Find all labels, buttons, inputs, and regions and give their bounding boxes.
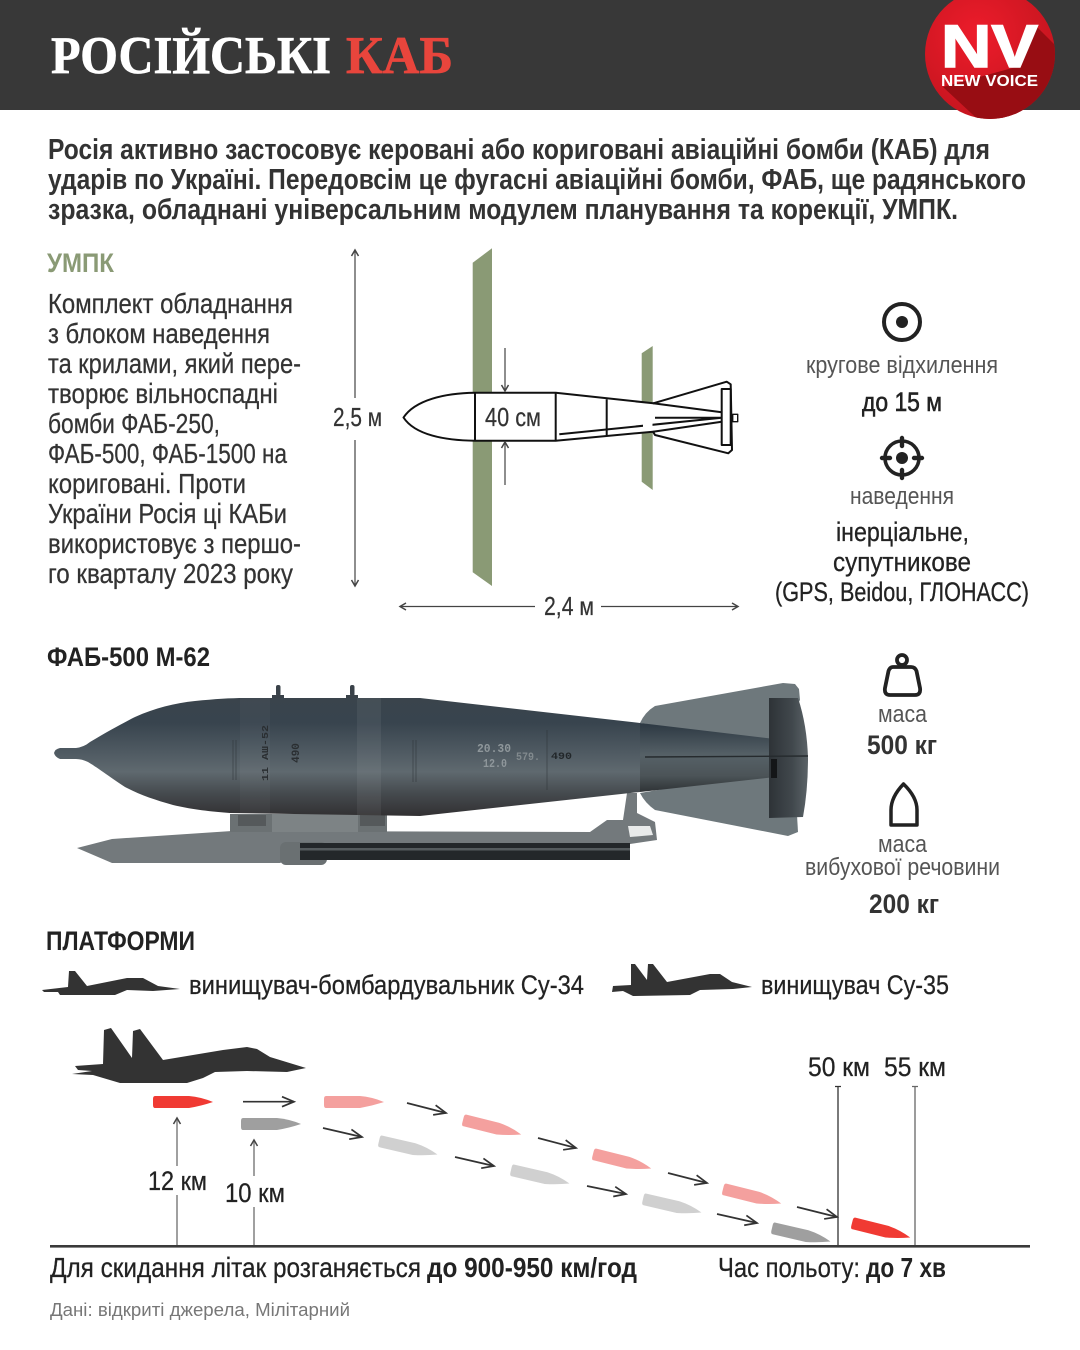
text block: УМПК description: України Росія ці КАБи: [48, 498, 287, 529]
altitude marker: 10 km: 10 км: [225, 1178, 285, 1208]
diagram: UMPK bomb schematic: [404, 248, 738, 586]
body markings: 11 АШ-52: [261, 725, 271, 781]
rail and mounts: [77, 793, 657, 865]
stat: guidance: інерціальне,: [836, 517, 969, 547]
heading: УМПК: УМПК: [47, 248, 114, 278]
altitude marker: 10 km: [225, 1140, 285, 1245]
text block: УМПК description: ФАБ-500, ФАБ-1500 на: [48, 438, 288, 469]
bomb body: [54, 698, 640, 816]
platform: Su-35: винищувач Су-35: [761, 970, 949, 1000]
icon: warhead: [891, 784, 917, 825]
note: release speed: до 900-950 км/год: [427, 1252, 637, 1283]
stat: mass: 500 кг: [867, 730, 937, 760]
stat: circular deviation: кругове відхилення: [806, 352, 998, 379]
icon: guidance crosshair: [882, 438, 922, 478]
body markings: 490: [291, 743, 303, 763]
red trajectory bombs: [153, 1096, 912, 1243]
trajectory arrows: [243, 1102, 837, 1223]
arrows: diameter: [504, 348, 506, 485]
range marker: 55 km: [884, 1052, 946, 1245]
heading: platforms: ПЛАТФОРМИ: [46, 926, 195, 956]
note: release speed: Для скидання літак розганяється: [50, 1252, 421, 1283]
text block: УМПК description: творює вільноспадні: [48, 378, 278, 409]
text block: УМПК description: [48, 288, 301, 589]
tail fins: [640, 683, 800, 836]
stat: explosive mass: [805, 831, 1000, 919]
label: 40 cm: 40 см: [485, 402, 541, 432]
range marker: 50 km: [808, 1052, 870, 1245]
illustration: FAB-500 M-62 bomb with UMPK kit: [54, 683, 808, 865]
range marker: 55 km: 55 км: [884, 1052, 946, 1082]
grey trajectory bombs: [241, 1118, 832, 1247]
platform: Su-35: [612, 964, 949, 1000]
body bands: [233, 690, 547, 820]
stat: explosive mass: маса: [878, 831, 928, 858]
platform: Su-34: [42, 970, 584, 1000]
logo: NV New Voice: NV: [941, 13, 1038, 80]
dimension: height 2,5 m: 2,5 м: [333, 402, 382, 432]
icon: Su-34 silhouette: [42, 971, 180, 995]
body markings: [261, 725, 572, 781]
icon: Su-35 silhouette: [612, 964, 752, 996]
stat: circular deviation: [806, 352, 998, 417]
text block: УМПК description: використовує з першо-: [48, 528, 301, 559]
wings: [473, 248, 653, 586]
intro text: зразка, обладнані універсальним модулем планування та корекції, УМПК.: [48, 194, 958, 226]
stat: mass: [867, 701, 937, 760]
range marker: 50 km: 50 км: [808, 1052, 870, 1082]
tail ring: [769, 698, 808, 818]
body markings: 12.0: [483, 757, 507, 771]
heading: FAB-500 M-62: ФАБ-500 М-62: [47, 642, 210, 672]
logo: NV New Voice: NEW VOICE: [941, 73, 1038, 90]
intro text: [48, 134, 1026, 226]
text block: УМПК description: та крилами, який пере-: [48, 348, 301, 379]
tail cone: [640, 723, 775, 792]
text block: УМПК description: Комплект обладнання: [48, 288, 293, 319]
text block: УМПК description: кориговані. Проти: [48, 468, 246, 499]
header bar: [0, 0, 1080, 110]
stat: guidance: [775, 483, 1029, 607]
platform: Su-34: винищувач-бомбардувальник Су-34: [189, 970, 584, 1000]
title: РОСІЙСЬКІ: [51, 27, 331, 85]
ground line: [50, 1245, 1030, 1248]
stat: explosive mass: 200 кг: [869, 889, 939, 919]
icon: weight: [885, 655, 920, 695]
body markings: 490: [551, 752, 572, 763]
altitude marker: 12 km: 12 км: [148, 1166, 207, 1196]
note: flight time: до 7 хв: [866, 1252, 946, 1283]
note: flight time: Час польоту:: [718, 1252, 860, 1283]
stat: guidance: наведення: [850, 483, 954, 510]
body markings: 20.30: [477, 742, 511, 756]
text block: УМПК description: го кварталу 2023 року: [48, 558, 293, 589]
text block: УМПК description: бомби ФАБ-250,: [48, 408, 220, 439]
text block: УМПК description: з блоком наведення: [48, 318, 270, 349]
stat: guidance: супутникове: [833, 547, 971, 577]
altitude marker: 12 km: [148, 1118, 207, 1245]
body markings: 579.: [516, 752, 540, 764]
title: КАБ: [346, 27, 453, 85]
icon: large aircraft silhouette: [72, 1028, 306, 1083]
source: Дані: відкриті джерела, Мілітарний: [50, 1300, 350, 1320]
icon: circular deviation: [884, 304, 920, 340]
stat: circular deviation: до 15 м: [862, 387, 942, 417]
logo: NV New Voice: [925, 0, 1055, 119]
dimension: length 2,4 m: 2,4 м: [544, 591, 594, 621]
lugs: [272, 685, 358, 699]
stat: mass: маса: [878, 701, 928, 728]
bomb outline: [404, 382, 738, 453]
chart: bomb trajectories: [153, 1096, 912, 1247]
stat: explosive mass: вибухової речовини: [805, 854, 1000, 881]
